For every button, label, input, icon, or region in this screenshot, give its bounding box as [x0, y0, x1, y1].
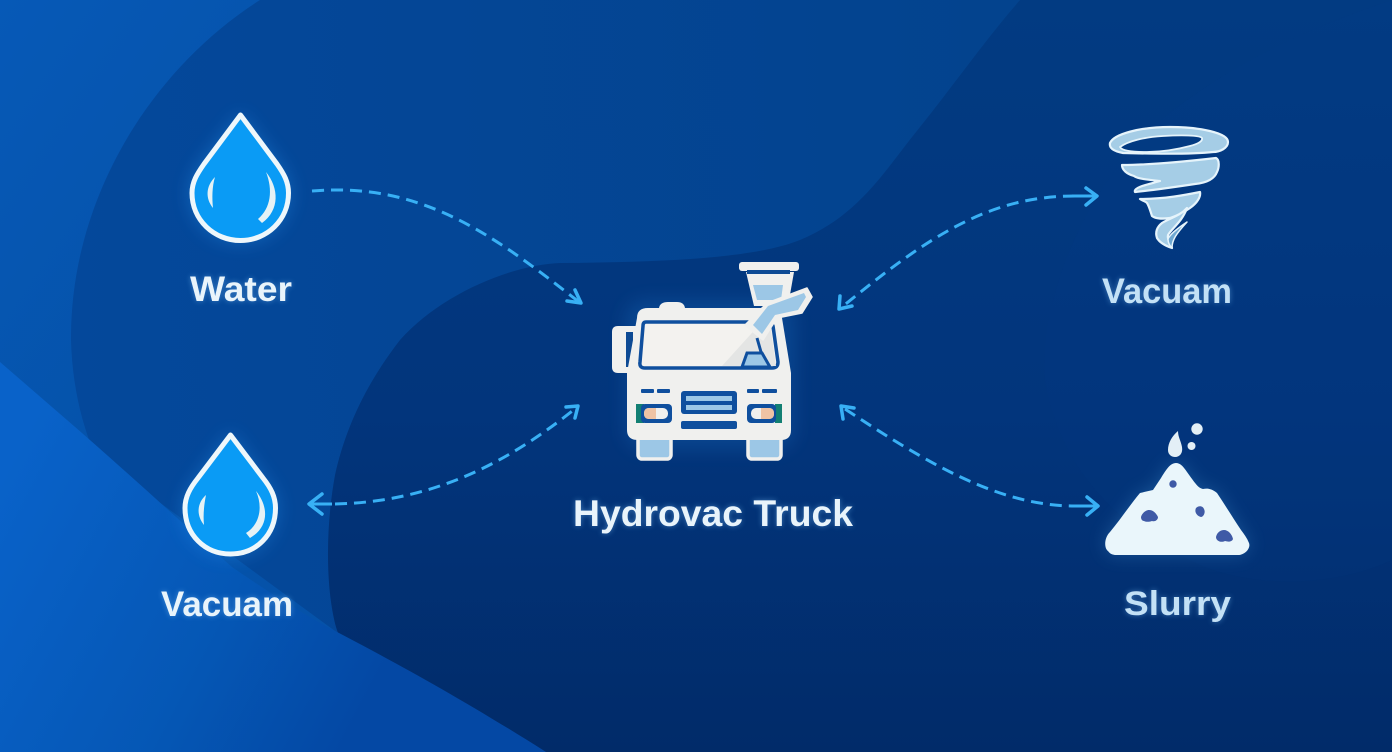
label: Vacuam (left): Vacuam [161, 585, 293, 624]
icon: slurry pile [1105, 423, 1249, 555]
slurry rocks [1141, 480, 1233, 542]
truck windshield [640, 322, 778, 368]
arrow: vacuum left and truck [309, 406, 578, 514]
arrow: truck and slurry [841, 406, 1098, 515]
truck cab [627, 302, 791, 440]
icon: water drop (Vacuam) [182, 432, 278, 557]
truck vacuum nozzle [745, 288, 812, 340]
arrow: vacuum and truck [839, 188, 1097, 309]
truck operator seat [742, 353, 770, 367]
label: Hydrovac Truck: Hydrovac Truck [573, 493, 853, 534]
slurry droplets [1168, 423, 1203, 457]
icon: tornado [1110, 127, 1228, 248]
truck wheels [638, 436, 781, 459]
arrow: water to truck [312, 190, 581, 303]
label: Vacuam (right): Vacuam [1102, 272, 1232, 311]
icon: water drop (Water) [189, 113, 291, 243]
truck funnel [739, 262, 799, 306]
truck headlights [636, 404, 782, 423]
label: Water: Water [190, 270, 292, 309]
truck grille [681, 391, 737, 429]
label: Slurry: Slurry [1124, 585, 1231, 623]
icon: hydrovac truck [612, 262, 812, 459]
truck mirror [612, 326, 636, 373]
truck marker lights [641, 389, 777, 393]
